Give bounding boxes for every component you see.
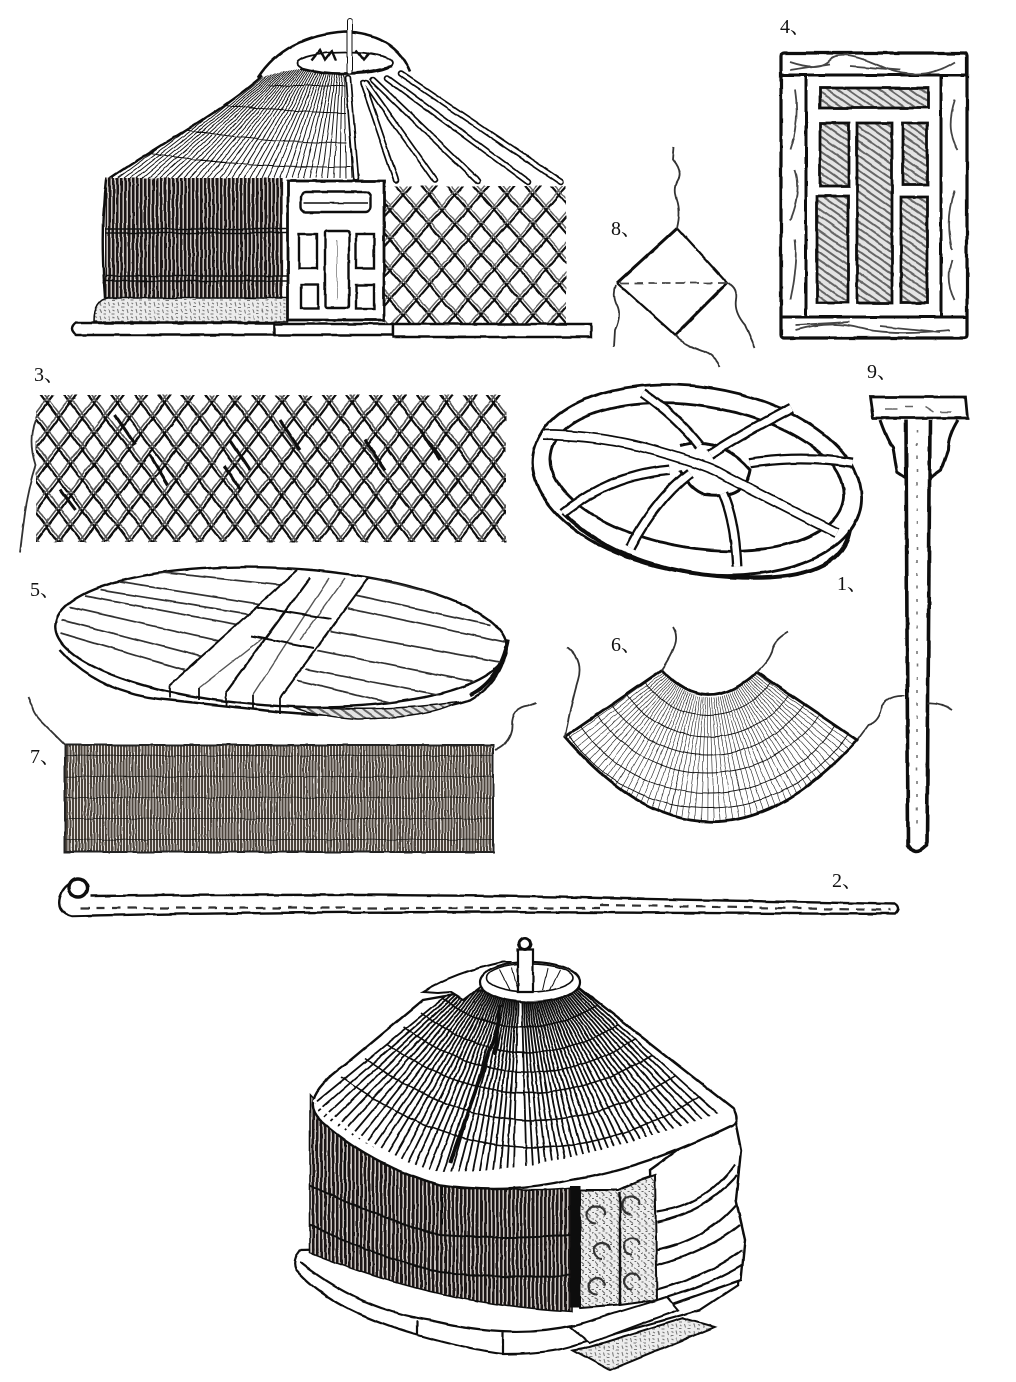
label 5: 5、 — [30, 579, 60, 601]
roof rim band — [313, 1100, 733, 1184]
label 6: 6、 — [611, 634, 641, 656]
part 3: lattice panel — [20, 395, 506, 552]
steps — [570, 1297, 715, 1370]
post shaft — [906, 420, 930, 852]
platform base — [295, 1240, 742, 1354]
exposed rafters — [348, 74, 561, 182]
part 5: floor disc — [52, 556, 510, 719]
disc planks — [60, 565, 505, 705]
roof ribs — [113, 69, 352, 178]
label 9: 9、 — [867, 361, 897, 383]
disc cross beams — [170, 570, 368, 705]
top yurt: cutaway elevation — [72, 11, 591, 337]
mast — [347, 18, 352, 74]
label 3: 3、 — [34, 364, 64, 386]
label 4: 4、 — [780, 16, 810, 38]
roof outline — [108, 76, 262, 180]
roof crown dome — [258, 32, 410, 78]
part 8: diamond cord — [614, 147, 755, 367]
label 8: 8、 — [611, 218, 641, 240]
felt wall — [103, 178, 287, 298]
wheel hub — [680, 443, 750, 496]
part 7: felt wall panel — [28, 697, 536, 852]
label 1: 1、 — [837, 573, 867, 595]
part 1: crown wheel — [518, 362, 876, 598]
bottom yurt: perspective view — [295, 935, 745, 1370]
smoke flap — [423, 962, 510, 1000]
door with scrolls — [580, 1175, 657, 1308]
roof ribs — [314, 990, 718, 1172]
part 2: long pole — [59, 879, 898, 916]
door — [288, 181, 384, 320]
right wall — [650, 1110, 745, 1310]
crown ring — [480, 962, 580, 1002]
ground planks — [72, 323, 591, 337]
part 4: door frame — [781, 53, 967, 338]
part 6: roof fan — [563, 626, 859, 824]
post cap — [870, 397, 968, 418]
mast — [518, 938, 533, 992]
door panels — [817, 88, 928, 303]
lattice wall — [384, 186, 566, 324]
base band — [94, 298, 288, 322]
label 7: 7、 — [30, 746, 60, 768]
felt wall stripes — [310, 1095, 572, 1312]
wheel spokes — [543, 393, 853, 567]
label 2: 2、 — [832, 870, 862, 892]
part 9: post — [857, 397, 968, 852]
crown ring — [297, 50, 393, 74]
roof — [312, 988, 736, 1189]
